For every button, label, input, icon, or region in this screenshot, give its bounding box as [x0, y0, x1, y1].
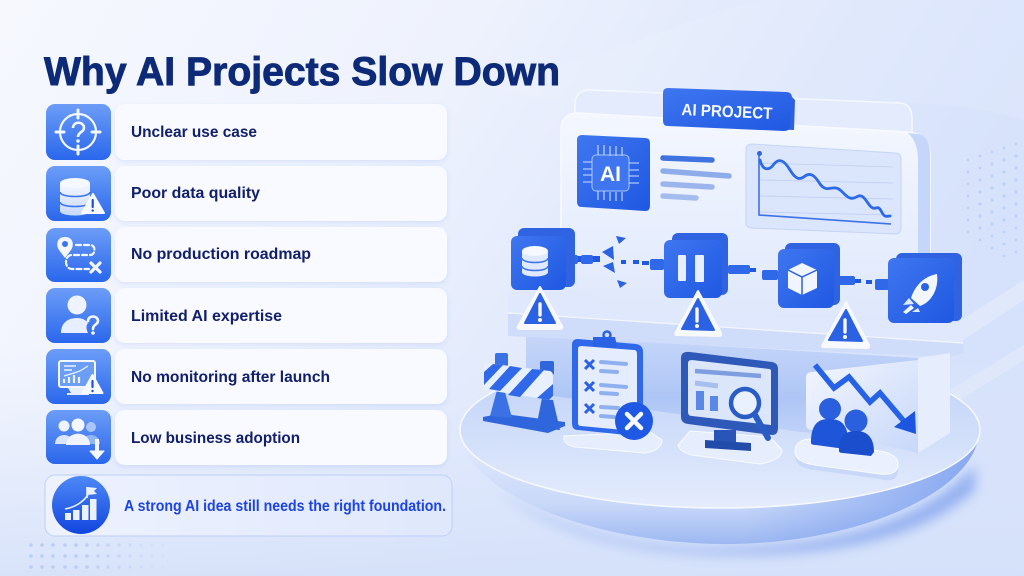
- icon: road barrier: [483, 353, 565, 433]
- card: limited AI expertise: [115, 288, 447, 343]
- AI PROJECT tag: [663, 88, 795, 131]
- icon: growth chart with flag: [52, 476, 110, 534]
- title: Why AI Projects Slow Down: [44, 50, 560, 94]
- icon: people on pedestal: [795, 398, 898, 480]
- list row: low business adoption: [46, 410, 447, 465]
- icon: people with down arrow: [46, 410, 111, 464]
- callout text: A strong AI idea still needs the right foundation.: [124, 498, 446, 515]
- pipeline cube: pause: [664, 233, 728, 298]
- front panel: [561, 113, 930, 330]
- list row: poor data quality: [46, 166, 447, 221]
- label: no production roadmap: No production roadmap: [131, 246, 311, 263]
- icon: monitor with magnifier: [678, 352, 782, 464]
- icon: monitor with warning: [46, 349, 111, 404]
- list row: limited AI expertise: [46, 288, 447, 343]
- pipeline cube: rocket: [888, 253, 962, 323]
- upper ledge: [508, 291, 964, 357]
- label: limited AI expertise: Limited AI expertise: [131, 308, 282, 325]
- label: poor data quality: Poor data quality: [131, 185, 260, 202]
- tag label: AI PROJECT: [681, 101, 773, 123]
- card: no production roadmap: [115, 227, 447, 282]
- list row: no production roadmap: [46, 227, 447, 282]
- label: unclear use case: Unclear use case: [131, 124, 257, 141]
- pipeline cube: database: [511, 228, 575, 290]
- icon: checklist clipboard: [564, 332, 662, 453]
- icon: falling arrow panel: [806, 353, 950, 453]
- icon: broken roadmap: [46, 228, 111, 282]
- card: unclear use case: [115, 104, 447, 160]
- text lines placeholder: [663, 158, 729, 198]
- callout: right foundation: [45, 475, 452, 536]
- icon: person with question mark: [46, 288, 111, 343]
- platform base: [460, 352, 980, 554]
- pipeline cube: box: [778, 243, 840, 308]
- front panel edge: [908, 133, 930, 330]
- decorative dots: bottom left: [29, 543, 165, 569]
- warning triangle: 1: [518, 287, 562, 329]
- card: no monitoring after launch: [115, 349, 447, 404]
- list row: no monitoring after launch: [46, 349, 447, 404]
- broken link fragments: [602, 236, 627, 288]
- pipeline connectors: [566, 255, 889, 290]
- back panel: [575, 90, 912, 200]
- label: low business adoption: Low business adoption: [131, 430, 300, 447]
- icon: database with warning: [46, 166, 111, 221]
- card: poor data quality: [115, 166, 447, 221]
- icon: target with question mark: [46, 104, 111, 160]
- card: low business adoption: [115, 410, 447, 465]
- decorative dots: right: [967, 143, 1018, 257]
- declining line chart: [746, 144, 901, 234]
- label: no monitoring after launch: No monitoring after launch: [131, 369, 330, 386]
- lower block: [526, 335, 920, 440]
- warning triangle: 3: [822, 302, 869, 348]
- chip label: AI: [600, 163, 621, 186]
- list row: unclear use case: [46, 104, 447, 160]
- warning triangle: 2: [675, 291, 721, 336]
- AI chip tile: [577, 135, 650, 211]
